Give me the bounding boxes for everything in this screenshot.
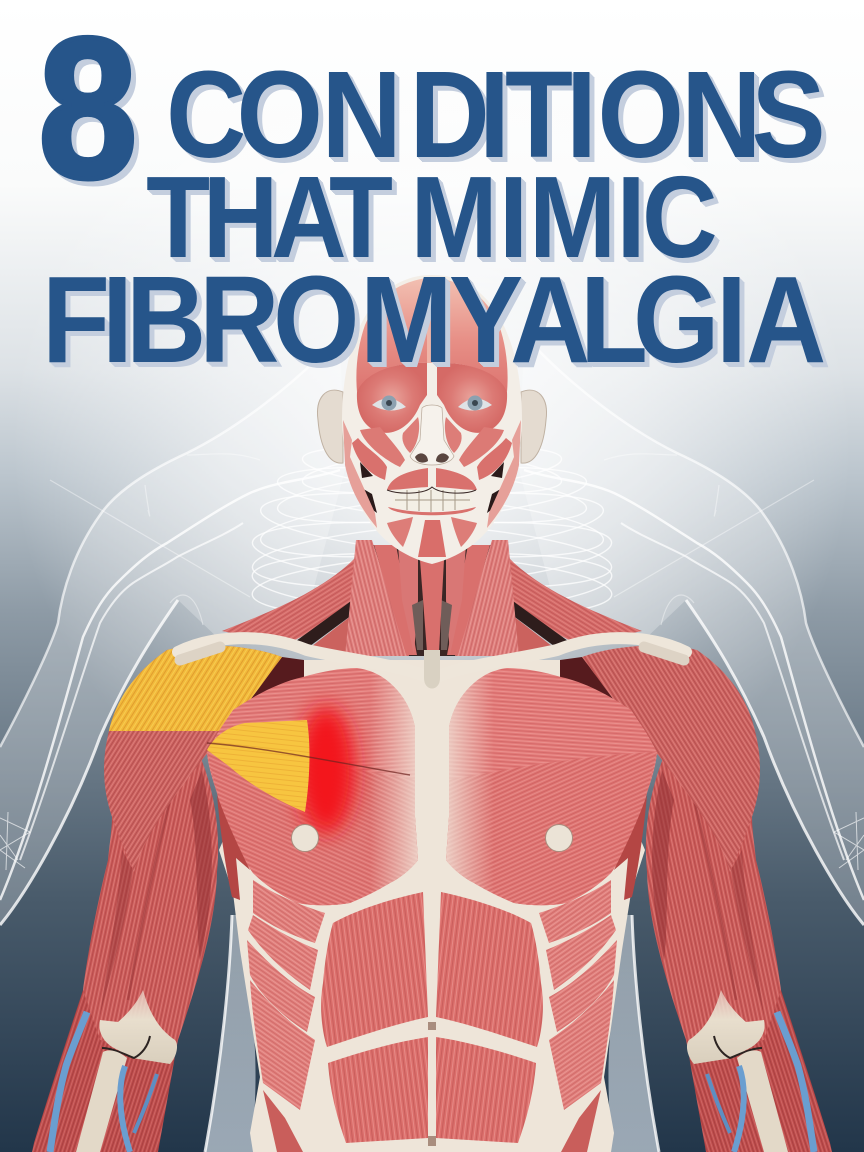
- acromion knobs: [180, 647, 684, 660]
- heading line 2: THAT MIMIC: [146, 153, 718, 282]
- left face muscles: [343, 363, 428, 547]
- number 8: 8: [38, 0, 137, 220]
- abdominal muscles right: [436, 795, 647, 1152]
- ghost ribcage: [250, 439, 614, 624]
- anatomical figure: [32, 275, 832, 1152]
- neck and trapezius left: [222, 540, 423, 656]
- torso base: [219, 660, 645, 1152]
- ghost body outline: [0, 335, 864, 1152]
- larynx: [424, 650, 440, 688]
- ears: [318, 390, 546, 463]
- right nipple: [546, 824, 572, 852]
- windpipe strap muscle: [420, 560, 444, 652]
- mouth: [387, 487, 476, 515]
- right arm: [582, 646, 832, 1152]
- forehead muscles: [356, 278, 508, 392]
- skull: [342, 275, 522, 564]
- abdominal muscles left: [217, 795, 428, 1152]
- shoulder shadow gaps: [232, 657, 632, 712]
- nostrils: [415, 453, 449, 463]
- pectoral fibre line: [207, 743, 410, 775]
- yellow deltoid: [108, 646, 282, 731]
- background glow: [0, 20, 864, 860]
- left pectoral with pain zone: [207, 660, 422, 910]
- left arm with highlighted deltoid: [32, 646, 282, 1152]
- chin muscle: [418, 520, 446, 557]
- linea alba bands: [428, 1022, 436, 1146]
- head: [318, 275, 546, 564]
- left nipple: [292, 824, 318, 852]
- heading line 1: CONDITIONS: [166, 46, 826, 183]
- heading line 3: FIBROMYALGIA: [42, 251, 826, 388]
- clavicles: [178, 638, 686, 676]
- title: [38, 0, 826, 388]
- nose: [410, 405, 454, 465]
- yellow pain zone: [207, 720, 309, 812]
- neck dark backing: [360, 545, 504, 656]
- right face muscles: [436, 363, 521, 547]
- forehead crown: [427, 278, 437, 363]
- neck and trapezius right: [441, 540, 642, 656]
- right pectoral: [442, 660, 657, 910]
- red pain glow: [296, 705, 356, 835]
